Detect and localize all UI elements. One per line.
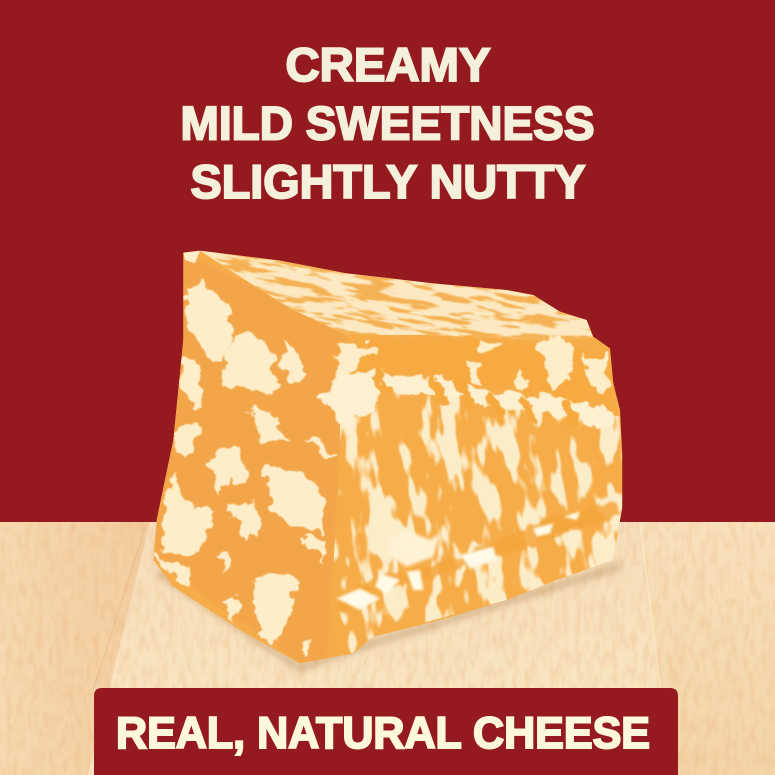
bottom banner (94, 688, 678, 775)
left face white blotches (153, 282, 337, 662)
cheese shadow (158, 566, 620, 668)
top face (200, 250, 594, 340)
heading line 3: SLIGHTLY NUTTY (190, 156, 586, 209)
right face marble (334, 390, 622, 654)
cheese wedge (153, 250, 622, 664)
bright left corner (183, 251, 200, 263)
upper right band (322, 338, 617, 437)
lower ledge band (337, 502, 620, 615)
upper ledge highlight (322, 370, 617, 437)
lower ledge highlights (337, 512, 580, 610)
heading (180, 39, 594, 209)
left face shade (154, 254, 328, 664)
banner text: REAL, NATURAL CHEESE (116, 709, 650, 758)
base orange (153, 250, 622, 664)
bright centre (390, 530, 440, 567)
heading line 1: CREAMY (286, 39, 490, 92)
heading line 2: MILD SWEETNESS (180, 98, 594, 150)
wooden table (0, 522, 775, 775)
